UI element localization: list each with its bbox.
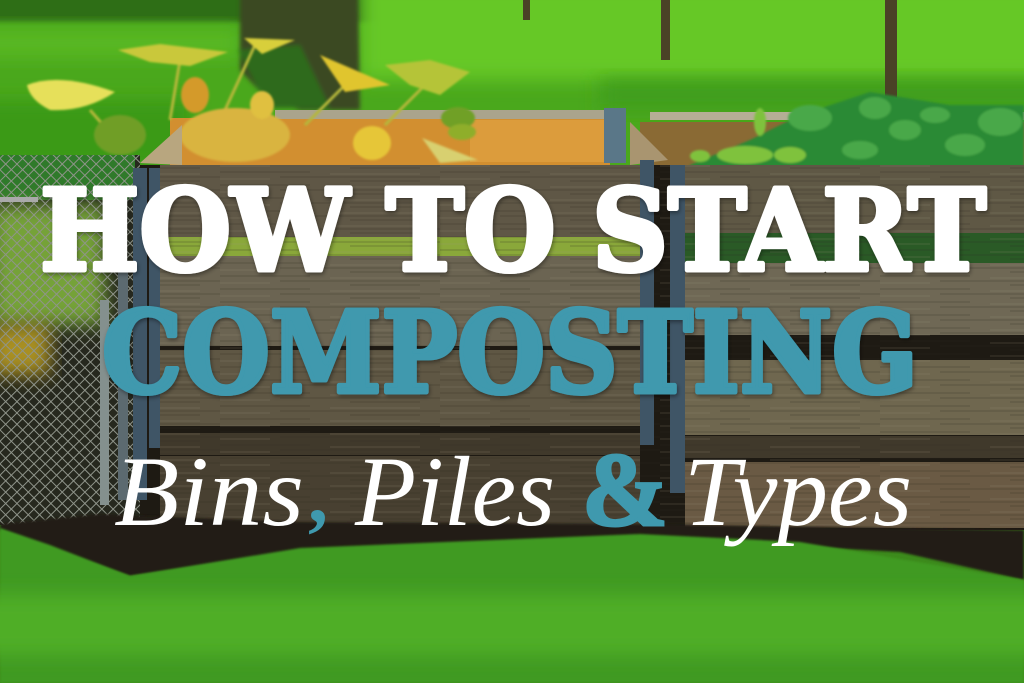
panel: bin interior bbox=[170, 110, 1024, 168]
background: soil strip bbox=[0, 514, 1024, 580]
heading: how to start: HOW TO START bbox=[40, 166, 986, 297]
tree trunk bbox=[238, 0, 360, 110]
subtitle ampersand: & bbox=[582, 431, 668, 548]
left bin planks bbox=[160, 165, 640, 238]
right bin planks bbox=[685, 165, 1024, 233]
subtitle word: bins: Bins bbox=[114, 436, 304, 547]
subtitle word: types: Types bbox=[684, 436, 912, 547]
fence posts bbox=[523, 0, 897, 98]
panel: wire mesh bin bbox=[0, 155, 140, 525]
plants: green bean bushes bbox=[690, 92, 1024, 170]
background: upper lawn bbox=[0, 0, 1024, 175]
subtitle comma: , bbox=[308, 452, 328, 540]
heading: composting: COMPOSTING bbox=[102, 288, 918, 419]
metal corner posts bbox=[100, 108, 685, 505]
subtitle bbox=[114, 431, 912, 548]
plants: squash leaves bbox=[27, 38, 478, 163]
foreground lawn bbox=[0, 528, 1024, 683]
panel: wooden compost bins bbox=[140, 122, 1024, 530]
subtitle word: piles: Piles bbox=[354, 436, 555, 547]
title bbox=[40, 166, 986, 419]
